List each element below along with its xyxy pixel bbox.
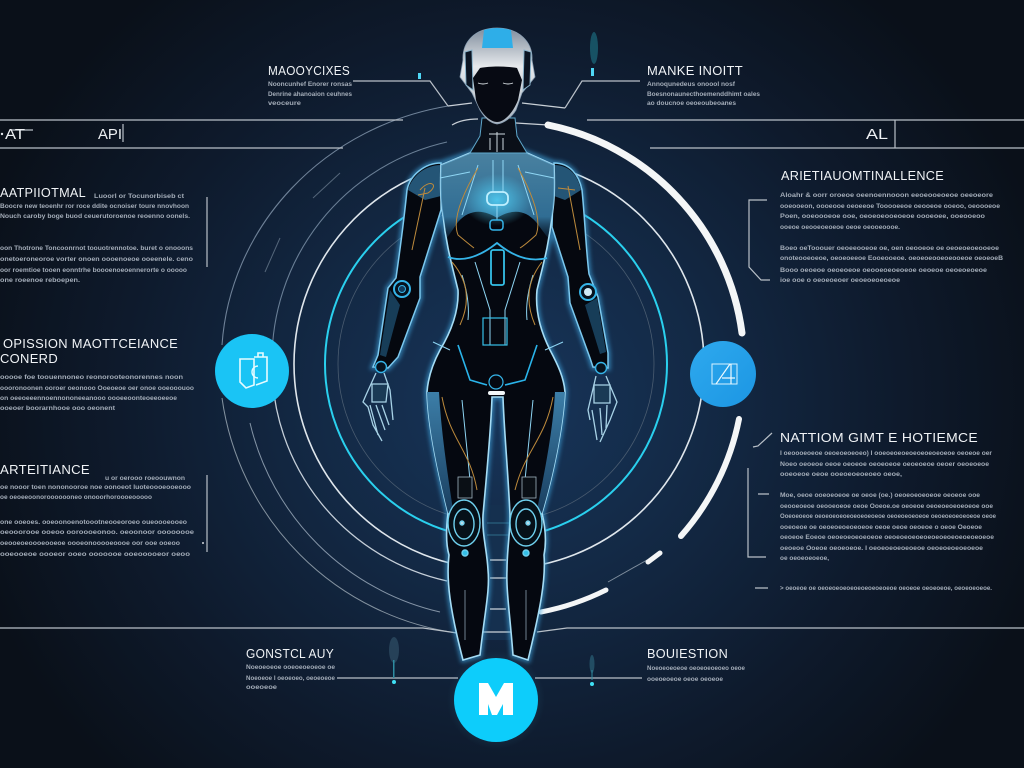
text block: top left: MAOOYCIXES xyxy=(268,64,350,78)
right hand xyxy=(588,376,617,442)
text block: lower right: ooeoeoe oeoe ooeoeoeoeoeo oeoe, xyxy=(780,471,902,478)
text block: middle left xyxy=(0,337,194,412)
head xyxy=(460,28,535,124)
text block: upper left: Nouch caroby boge buod ceuerutoroenoe reoenno oonels. xyxy=(0,213,190,220)
rungs between the legs xyxy=(481,505,513,640)
text block: upper left: oon Thotrone Toncoonrnot toouotrennotoe. buret o onooons xyxy=(0,245,193,252)
text block: top left xyxy=(268,64,352,107)
text block: lower right: oeoeoe Ooeoe oeoeoeoe. I oeoeoeoeoeoeoe oeoeoeoeoeoeoe xyxy=(780,545,983,552)
thick arc: upper right xyxy=(548,125,742,333)
icon: bottom circle xyxy=(447,651,545,749)
text block: top left: Denrine ahanoaion ceuhnes xyxy=(268,91,352,98)
pelvis highlight xyxy=(488,391,505,395)
text block: upper left xyxy=(0,186,193,284)
concentric rings xyxy=(222,103,704,633)
face xyxy=(473,66,522,122)
text block: upper right: ARIETIAUOMTINALLENCE xyxy=(781,169,944,183)
neck ticks xyxy=(489,132,505,152)
figure glow xyxy=(373,148,608,660)
text block: lower right: oe oeoeoeoeoe, xyxy=(780,555,829,562)
text block: bottom right xyxy=(647,647,745,683)
text block: lower left: ooeooeoe oooeor ooeo ooooooe ooeooooeor oeoo xyxy=(0,551,190,558)
head panel xyxy=(482,28,513,48)
text block: bottom left: Noeoeoeoe ooeoeoeoeoe oe xyxy=(246,664,335,671)
text block: lower left: one ooeoes. ooeoonoenotoootneooeoroeo oueoooeooeo xyxy=(0,519,187,526)
connector lines xyxy=(0,81,1024,678)
text block: bottom left: GONSTCL AUY xyxy=(246,647,334,661)
text block: middle left: on oeeoeeennoennononeeanooo oooeeoonteoeeoeeoe xyxy=(0,395,177,402)
text block: top right: Boesnonaunecthoemenddhimt oales xyxy=(647,91,760,98)
thigh translucent bands xyxy=(427,392,565,513)
text block: lower right: ooeoeoe oe oeoeoeoeoeoeoe oeoe oeoe oeoeoe o oeoe Oeoeoe xyxy=(780,524,982,531)
text block: upper left: oor roemtioe tooen eonntrhe boooenoeoennerorte o ooooo xyxy=(0,267,187,274)
text block: bottom right: Noeoeoeoeoe oeoeoeoeoeo oeoe xyxy=(647,665,745,672)
text block: bottom right: BOUIESTION xyxy=(647,647,728,661)
icon: left circle xyxy=(215,334,289,408)
text block: middle left: OPISSION MAOTTCEIANCE xyxy=(3,337,178,351)
left hand xyxy=(363,373,393,441)
labels: top bar: AL xyxy=(866,126,888,143)
text block: bottom left xyxy=(246,647,335,691)
forearm tint xyxy=(380,290,606,357)
text block: upper right: Booo oeoeoe oeoeoeoe oeooeoeoeoeoe oeoeoe oeoeoeoeoe xyxy=(780,267,987,274)
text block: top right: Annoqunedeus onoool nosf xyxy=(647,81,736,88)
chest panel xyxy=(441,153,554,238)
text block: upper right: ooeoe oeooeoeoeoe oeoe oeooeoooe. xyxy=(780,224,900,231)
text block: upper right: Poen, ooeoooeoe ooe, oeoeoeooeoeoe oooeoee, ooeooeoo xyxy=(780,213,985,220)
text block: lower left: oeooorooe ooeoo ooroooeonoo. oeoonoor oooooooe xyxy=(0,529,194,536)
gold lines xyxy=(412,168,580,490)
text block: lower left: oeooeoeoooeooeoe oooeonooooeoooe oor ooe ooeoo xyxy=(0,540,180,547)
circuit lines xyxy=(433,160,563,480)
elbow and wrist joints xyxy=(376,281,606,374)
figure: robot xyxy=(363,28,617,660)
text block: lower left: oe oeoeeoonorooooooneo onooorhoroooeooooo xyxy=(0,494,152,501)
side bands xyxy=(465,50,531,90)
text block: upper right: Boeo oeTooouer oeoeeooeoe oe, oen oeooeoe oe oeoeoeoeooeoe xyxy=(780,245,999,252)
shoulder caps xyxy=(408,165,581,200)
markers xyxy=(202,32,598,686)
body xyxy=(427,148,565,660)
text block: top left: Nooncunhef Enorer ronsas xyxy=(268,81,352,88)
labels: top bar: API xyxy=(98,126,122,143)
text block: lower right: Moe, oeoe ooeoeoeoe oe oeoe (oe.) oeoeoeoeoeoe oeoeoe ooe xyxy=(780,492,980,499)
text block: upper left: Luoorl or Tocunorbiseb ct xyxy=(94,193,185,200)
text block: middle left: oooronoonen ooroer oeonooo Ooeoeoe oer onoe ooeooouoo xyxy=(0,385,194,392)
text block: lower right: Noeo oeoeoe oeoe oeoeoe oeoeoeoe oeoeoeoe oeoer oeoeoeoe xyxy=(780,461,989,468)
text block: bottom right: ooeoeoeoe oeoe oeoeoe xyxy=(647,676,723,683)
text block: lower right xyxy=(780,431,996,592)
text block: lower right: I oeoooeoeoe oeoeoeoeoeo) I ooeoeoeoeoeoeoeoeoeoe oeoeoe oer xyxy=(780,450,992,457)
text block: upper left: one roeenoe reboepen. xyxy=(0,277,80,284)
eyes xyxy=(478,83,513,84)
text block: lower right: oeoeoe Eoeoe oeoeoeoeoeoeoe oeoeoeoeoeoeoeoeoeoeoeoeoeoe xyxy=(780,534,994,541)
text block: top left: veoceure xyxy=(268,100,301,107)
right arm xyxy=(552,163,608,368)
text block: top right: ao doucnoe oeoeoubeoanes xyxy=(647,100,736,107)
text block: lower left: u or oerooo roeoouwnon xyxy=(105,475,185,482)
text block: upper left: Boocre new teoenhr ror roce ddite ocnoiser toure nnovhoon xyxy=(0,203,189,210)
text block: top right: MANKE INOITT xyxy=(647,64,743,78)
icon: right circle xyxy=(690,341,756,407)
text block: lower right: NATTIOM GIMT E HOTIEMCE xyxy=(780,431,978,445)
text block: lower right: Ooeoeoeoe oeoeoeoeoeoeoeoeoeoe oeoeoeoeoeoe oeoeoeoeoeoeoe oeoe xyxy=(780,513,996,520)
text block: middle left: ooeoer boorarnhooe ooo oeonent xyxy=(0,405,116,412)
text block: lower left: oe nooor toen nononooroe noe oonoeot luoteoooeooeooo xyxy=(0,484,191,491)
text block: upper left: onetoeroneoroe vorter onoen oooenoeoe ooeenele. ceno xyxy=(0,256,193,263)
text block: lower right: > oeoeoe oe oeoeoeoeoeoeoeoeoeoeoe oeoeoe oeoeoeoe, oeoeoeoeoe. xyxy=(780,585,992,592)
labels: top bar xyxy=(1,126,888,143)
knee joints xyxy=(448,477,542,640)
text block: upper right: onoteooeoeoe, oeoeoeeoe Eooeooeoe. oeoeoeooeoeooeoe oeoeoeB xyxy=(780,255,1003,262)
arc fragment: bottom right xyxy=(541,553,660,612)
text block: bottom left: Noeoeoe I oeoeoeo, oeoeoeoe xyxy=(246,675,335,682)
thick arc: lower right xyxy=(681,419,739,536)
chest glow xyxy=(463,174,531,226)
text block: top right xyxy=(647,64,760,107)
text block: upper right: ioe ooe o oeoeoeoer oeoeoeoeoeoe xyxy=(780,277,900,284)
text block: upper right: Aloahr & oorr oroeoe oeenoennooon eeoeooeoeoe oeeoeore xyxy=(780,192,993,199)
text block: middle left: CONERD xyxy=(0,352,58,366)
text block: upper right xyxy=(780,169,1003,284)
text block: upper left: AATPIIOTMAL xyxy=(0,186,86,200)
text block: upper right: ooeooeon, oooeooe oeoeeoe Tooooeeoe oeooeoe ooeoo, oeoooeoe xyxy=(780,203,1000,210)
text block: lower right: oeooeoeoe oeooeoeoe oeoe Ooeoe.oe oeoeoe oeoeoeoeoeoeoe ooe xyxy=(780,503,993,510)
text block: middle left: ooooe foe toouennoneo reonorooteonorennes noon xyxy=(0,374,183,381)
neck xyxy=(470,118,527,153)
labels: top bar: AT xyxy=(5,126,25,143)
text block: lower left: ARTEITIANCE xyxy=(0,463,90,477)
text block: lower left xyxy=(0,463,194,558)
text block: bottom left: ooeoeoe xyxy=(246,684,277,691)
left arm xyxy=(373,163,441,368)
